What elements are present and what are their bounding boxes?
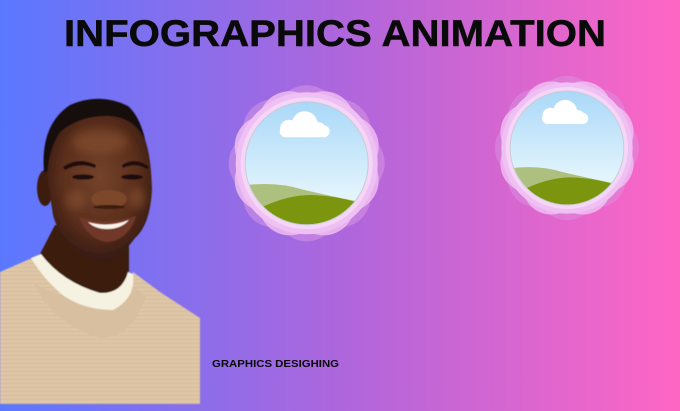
sweater collar ribbing bbox=[34, 283, 146, 338]
title: INFOGRAPHICS ANIMATION bbox=[64, 13, 606, 54]
medallion: right image placeholder bbox=[495, 76, 639, 220]
face highlights bbox=[66, 130, 145, 210]
eyebrows bbox=[63, 161, 149, 170]
medallion: left image placeholder bbox=[229, 85, 385, 241]
cloud bbox=[542, 100, 588, 124]
ring bbox=[236, 92, 378, 234]
landscape bbox=[245, 101, 369, 233]
neck bbox=[40, 225, 129, 294]
portrait photo of smiling man bbox=[0, 99, 200, 404]
nose bbox=[91, 190, 127, 208]
caption: GRAPHICS DESIGHING bbox=[212, 358, 339, 370]
hair bbox=[44, 99, 149, 172]
mouth and teeth bbox=[79, 216, 136, 242]
eyes bbox=[72, 174, 94, 180]
ring bbox=[501, 82, 633, 214]
white undershirt collar bbox=[31, 254, 133, 310]
cloud bbox=[280, 111, 330, 137]
landscape bbox=[510, 91, 624, 213]
ear bbox=[37, 170, 53, 206]
face bbox=[47, 116, 152, 262]
scalloped petals bbox=[229, 85, 385, 241]
sweater bbox=[0, 258, 200, 404]
scalloped petals bbox=[495, 76, 639, 220]
